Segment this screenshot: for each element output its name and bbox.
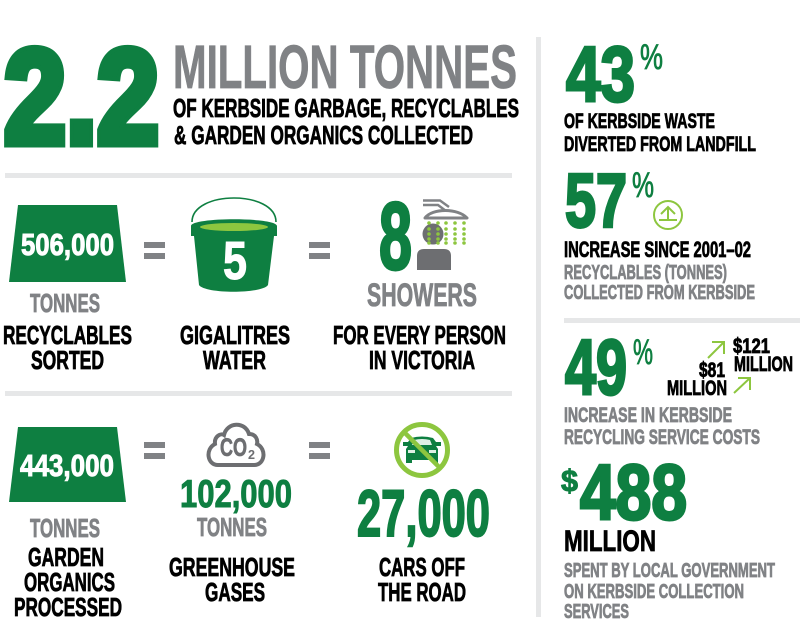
label: cars off the road: CARS OFF (379, 552, 465, 582)
stat: 49 percent increase (564, 323, 793, 449)
label: tonnes: TONNES (30, 288, 100, 318)
arrow: up from 81 million (734, 378, 750, 393)
label: greenhouse gases (169, 552, 295, 607)
equals sign (144, 242, 165, 259)
arrow: up to 121 million (708, 342, 724, 358)
number: 57: 57 (565, 159, 627, 244)
label: million: MILLION (564, 525, 656, 558)
number: 8: 8 (379, 183, 412, 290)
percent sign: % (632, 166, 654, 205)
label: 81 million: $81 (699, 359, 725, 382)
label: garden organics processed: ORGANICS (24, 567, 115, 597)
stat: 43 percent diverted (564, 30, 756, 156)
icon: CO2 cloud: CO (220, 434, 247, 462)
number: 102,000: 102,000 (180, 473, 292, 516)
equals sign (309, 442, 330, 459)
label: recyclables sorted (3, 320, 132, 375)
number: 49: 49 (565, 323, 627, 411)
label: garden organics processed: PROCESSED (14, 592, 122, 622)
text: increase in service costs (564, 404, 760, 449)
label: 121 million (733, 335, 793, 376)
label: gigalitres water: GIGALITRES (180, 320, 290, 350)
big number 2.2: 2.2 (4, 23, 159, 172)
dollar sign: $ (561, 463, 578, 498)
number: 27,000: 27,000 (357, 476, 490, 550)
label: garden organics processed: GARDEN (28, 542, 104, 572)
number: 43: 43 (566, 30, 635, 118)
text: spent by local government (564, 560, 775, 623)
label: for every person in Victoria: FOR EVERY PERSON (333, 320, 506, 350)
text: diverted from landfill: OF KERBSIDE WASTE (564, 110, 715, 133)
label: cars off the road (378, 552, 466, 607)
label: 81 million (667, 359, 727, 400)
icon: up arrow in circle (654, 201, 682, 229)
label: recyclables sorted: RECYCLABLES (3, 320, 132, 350)
percent sign: % (640, 38, 663, 77)
icon: shower and person (417, 200, 467, 270)
label: recyclables sorted: SORTED (31, 345, 104, 375)
label: tonnes: TONNES (197, 512, 267, 542)
text: recyclables collected from kerbside (564, 262, 755, 304)
label: for every person in Victoria (333, 320, 506, 375)
icon: water bucket (191, 198, 277, 292)
icon: garden organics pile: 443,000 (20, 448, 114, 483)
headline: 2.2 million tonnes (4, 23, 519, 172)
icon: no cars (396, 424, 448, 476)
label: gigalitres water: WATER (203, 345, 266, 375)
panel: garden organics row (9, 424, 490, 622)
icon: CO2 cloud: 2 (248, 447, 255, 462)
label: greenhouse gases: GREENHOUSE (169, 552, 295, 582)
label: 81 million: MILLION (667, 377, 727, 400)
panel: recyclables row (3, 183, 506, 375)
subheading line 2: & GARDEN ORGANICS COLLECTED (174, 120, 473, 150)
icon: garden organics pile (9, 427, 126, 502)
icon: recyclables pile: 506,000 (21, 227, 114, 262)
icon: water bucket: 5 (223, 231, 247, 291)
label: showers: SHOWERS (367, 277, 477, 313)
text: diverted from landfill (564, 110, 756, 156)
equals sign (309, 242, 330, 259)
percent sign: % (633, 333, 653, 372)
number: 488: 488 (580, 448, 687, 536)
label: 121 million: $121 (733, 335, 770, 358)
label: tonnes: TONNES (30, 513, 100, 543)
heading: million tonnes: MILLION TONNES (173, 33, 517, 101)
label: greenhouse gases: GASES (205, 577, 265, 607)
label: for every person in Victoria: IN VICTORIA (369, 345, 475, 375)
stat: 488 million (561, 448, 775, 623)
stat: 57 percent increase (564, 159, 755, 304)
subheading line 1: OF KERBSIDE GARBAGE, RECYCLABLES (173, 93, 519, 123)
icon: recyclables pile (9, 205, 126, 282)
equals sign (144, 442, 165, 459)
label: garden organics processed (14, 542, 122, 622)
label: cars off the road: THE ROAD (378, 577, 466, 607)
icon: CO2 cloud (209, 425, 263, 465)
text: spent by local government: SERVICES (564, 601, 629, 623)
label: gigalitres water (180, 320, 290, 375)
